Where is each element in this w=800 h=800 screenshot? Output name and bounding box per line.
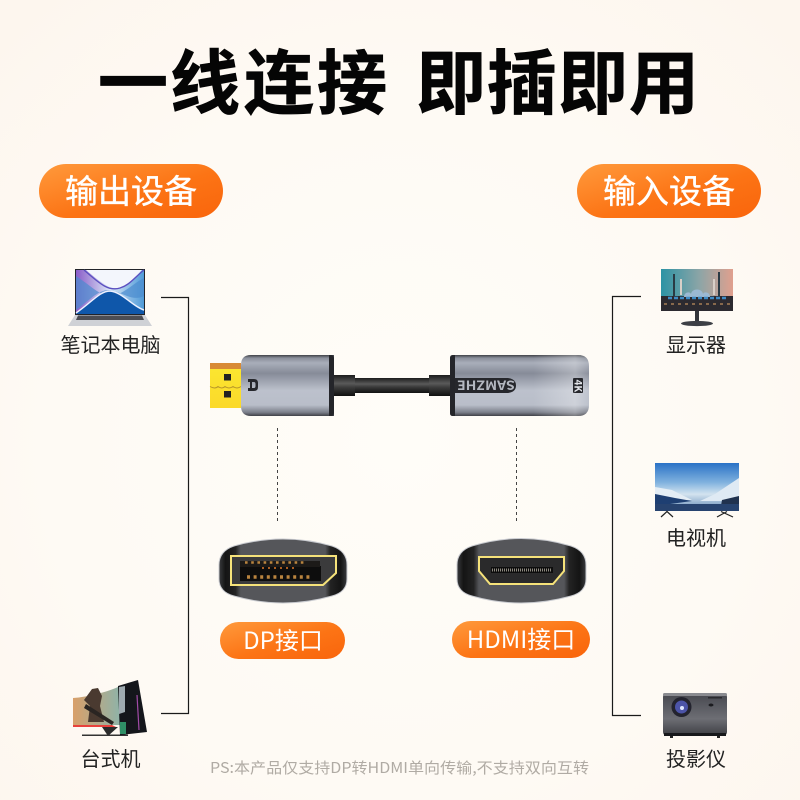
title: 插 [487, 28, 557, 129]
title [98, 28, 699, 129]
HDMI port [457, 538, 586, 603]
badge: HDMI port: HDMI接口 [467, 620, 575, 655]
label: projector: 投影仪 [666, 743, 726, 772]
HDMI body: 4K [572, 380, 586, 392]
badge: input devices [577, 164, 761, 218]
title: 接 [317, 28, 387, 129]
title: 即 [416, 28, 486, 129]
bracket: right [612, 296, 641, 716]
DP body [241, 355, 334, 416]
footnote: PS:本产品仅支持DP转HDMI单向传输,不支持双向互转 [210, 757, 589, 778]
icon: TV [655, 463, 739, 517]
title: 线 [170, 28, 240, 129]
label: monitor: 显示器 [666, 329, 726, 358]
badge: DP port [220, 621, 345, 659]
icon: projector [663, 693, 727, 738]
label: laptop: 笔记本电脑 [60, 329, 160, 358]
DP port [219, 539, 347, 603]
label: desktop PC: 台式机 [80, 743, 140, 772]
title: 连 [244, 28, 314, 129]
HDMI body: SAMZHE [457, 376, 515, 396]
bracket: left [161, 298, 188, 714]
badge: DP port: DP接口 [243, 621, 323, 656]
label: TV: 电视机 [666, 522, 726, 551]
badge: output devices [39, 164, 223, 218]
badge: output devices: 输出设备 [65, 165, 197, 213]
badge: input devices: 输入设备 [603, 165, 735, 213]
dashed leader: DP [276, 428, 278, 522]
icon: desktop PC [73, 680, 147, 736]
icon: laptop [68, 269, 152, 326]
cable [334, 375, 450, 396]
adapter cable [210, 355, 589, 416]
HDMI body [450, 355, 589, 416]
title: 即 [558, 28, 628, 129]
title: 一 [98, 28, 168, 129]
dashed leader: HDMI [516, 428, 518, 522]
DP plug tip [210, 363, 241, 408]
title: 用 [629, 28, 699, 129]
icon: monitor [661, 269, 733, 326]
